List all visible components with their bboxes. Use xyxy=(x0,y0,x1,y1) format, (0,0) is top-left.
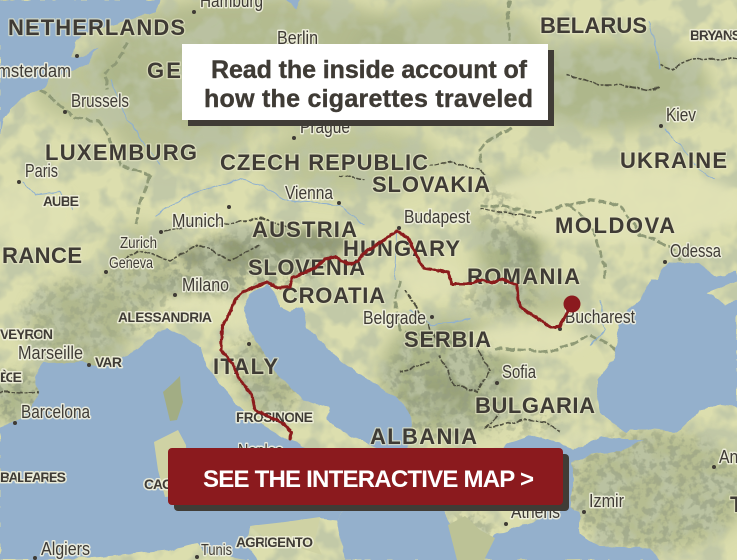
button text: SEE THE INTERACTIVE MAP > xyxy=(203,466,534,493)
Adriatic and Ionian Sea xyxy=(243,285,463,560)
label: Var: VAR xyxy=(95,354,122,370)
label: Prague: Prague xyxy=(300,117,350,137)
label: Moldova: MOLDOVA xyxy=(555,213,675,238)
label: Italy: ITALY xyxy=(213,354,278,379)
label: Aveyron: VEYRON xyxy=(0,326,53,342)
label: Sofia: Sofia xyxy=(502,362,537,382)
callout box: headline xyxy=(182,44,554,126)
button shadow xyxy=(174,454,569,511)
headline text: how the cigarettes traveled xyxy=(204,85,533,113)
label: Netherlands: NETHERLANDS xyxy=(8,15,185,40)
label: Algiers: Algiers xyxy=(41,539,90,559)
label: Budapest: Budapest xyxy=(404,207,470,227)
Peloponnese xyxy=(448,516,495,560)
Baltic coast xyxy=(285,0,300,10)
headline text: Read the inside account of xyxy=(211,56,528,84)
label: Kiev: Kiev xyxy=(666,105,696,125)
label: Paris: Paris xyxy=(25,161,58,181)
label: Marseille: Marseille xyxy=(18,343,83,363)
label: Naples: Naples xyxy=(238,441,283,461)
Corsica xyxy=(163,376,183,421)
callout panel xyxy=(182,44,548,120)
label: Munich: Munich xyxy=(172,211,224,231)
label: Luxemburg: LUXEMBURG xyxy=(45,140,197,165)
callout shadow xyxy=(188,50,554,126)
mountain relief xyxy=(0,185,737,554)
label: Czech Republic: CZECH REPUBLIC xyxy=(220,150,428,175)
label: Romania: ROMANIA xyxy=(467,264,580,289)
label: Cagliari: CAGLIARI xyxy=(144,476,204,492)
label: Izmir: Izmir xyxy=(589,491,624,511)
label: Belgrade: Belgrade xyxy=(363,308,426,328)
label: Vienna: Vienna xyxy=(285,183,334,203)
label: Frosinone: FROSINONE xyxy=(236,409,313,425)
label: Tunis: Tunis xyxy=(201,542,232,559)
headline text xyxy=(204,56,533,113)
Sardinia xyxy=(154,430,187,497)
label: Geneva: Geneva xyxy=(109,255,153,272)
North Sea xyxy=(0,0,160,135)
label: Bulgaria: BULGARIA xyxy=(475,393,595,418)
Mediterranean Sea xyxy=(0,329,350,560)
label: Athens: Athens xyxy=(511,502,560,522)
button face xyxy=(168,448,563,505)
label: Ukraine: UKRAINE xyxy=(620,148,727,173)
route start marker xyxy=(564,296,580,312)
label: Croatia: CROATIA xyxy=(282,283,385,308)
label: Hungary: HUNGARY xyxy=(343,236,460,261)
label: Slovenia: SLOVENIA xyxy=(248,255,365,280)
label: France: RANCE xyxy=(2,243,82,268)
label: Austria: AUSTRIA xyxy=(252,217,357,242)
label: Baleares: BALEARES xyxy=(0,469,66,485)
label: Serbia: SERBIA xyxy=(404,327,491,352)
button: see the interactive map xyxy=(168,448,569,511)
label: Alessandria: ALESSANDRIA xyxy=(118,309,212,325)
label: Milano: Milano xyxy=(182,275,229,295)
label: Zurich: Zurich xyxy=(120,235,157,252)
label: Belarus: BELARUS xyxy=(540,13,647,38)
Aegean Sea xyxy=(484,435,660,560)
label: Bucharest: Bucharest xyxy=(565,307,635,327)
label: Albania: ALBANIA xyxy=(370,424,477,449)
label: Germany: GERMANY xyxy=(147,58,272,83)
label: Agrigento: AGRIGENTO xyxy=(236,534,313,550)
label: Slovakia: SLOVAKIA xyxy=(372,172,490,197)
Sicily xyxy=(250,517,322,555)
label: Aube: AUBE xyxy=(43,193,79,209)
Black Sea xyxy=(597,262,737,433)
label: Liege: ÈGE xyxy=(0,369,22,385)
label: Berlin: Berlin xyxy=(277,28,318,48)
borders xyxy=(0,0,737,432)
cigarette route line xyxy=(221,231,572,439)
label: Odessa: Odessa xyxy=(670,241,722,261)
label: Barcelona: Barcelona xyxy=(21,402,91,422)
label: Brussels: Brussels xyxy=(71,91,129,111)
